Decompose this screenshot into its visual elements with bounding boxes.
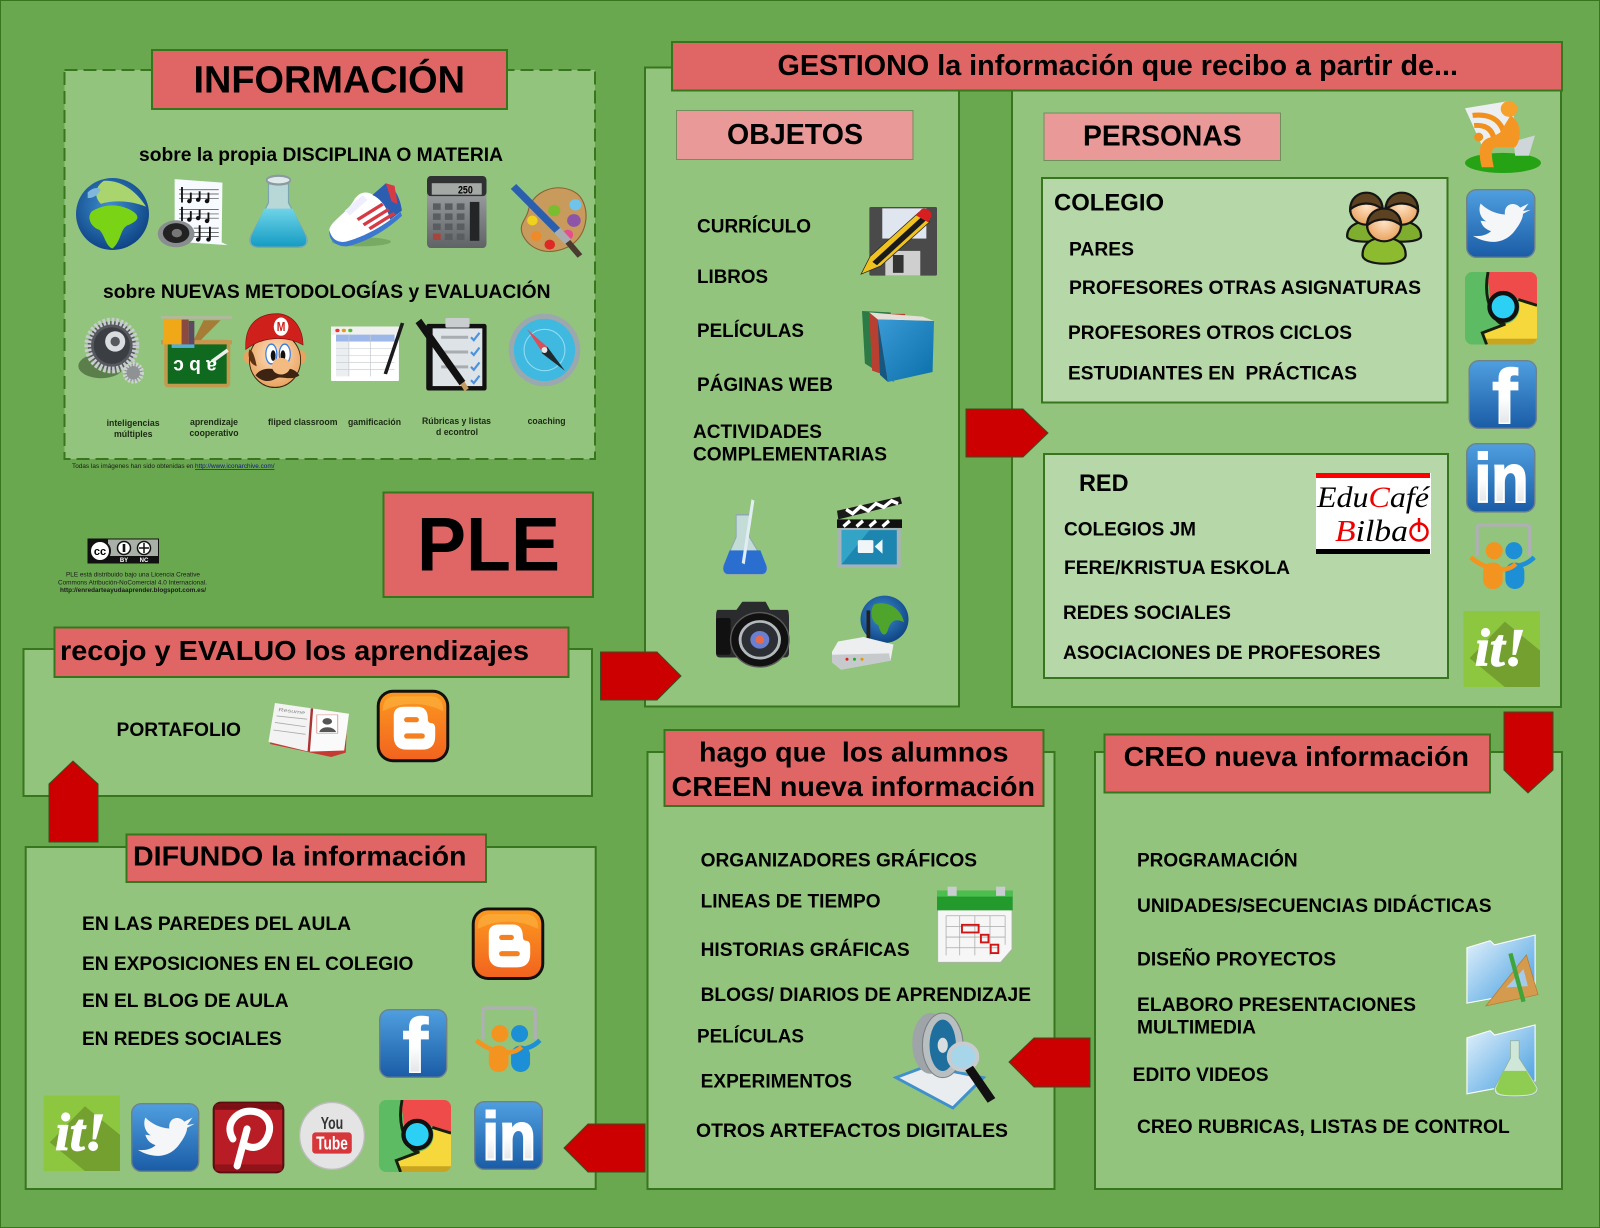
list: objetos items: PELÍCULAS: [697, 320, 804, 342]
image credit: Todas las imágenes han sido obtenidas en: [72, 463, 194, 470]
image credit: [72, 463, 275, 470]
list: colegio items: PARES: [1069, 240, 1134, 260]
icon: Creative Commons badge: BY: [120, 558, 128, 564]
icon: Creative Commons badge: [88, 539, 158, 564]
label: RED: RED: [1079, 470, 1128, 497]
list: creen items: PELÍCULAS: [697, 1026, 804, 1048]
list: creo items: CREO RUBRICAS, LISTAS DE CONTROL: [1137, 1117, 1510, 1138]
icon: group of people: [1347, 193, 1421, 264]
list: red items: ASOCIACIONES DE PROFESORES: [1063, 643, 1380, 664]
icon: Facebook: [1469, 354, 1536, 441]
icon: Facebook: f: [1492, 354, 1518, 441]
label: COLEGIO: COLEGIO: [1054, 190, 1164, 217]
list: creo items: UNIDADES/SECUENCIAS DIDÁCTICAS: [1137, 895, 1492, 917]
list: colegio items: [1068, 240, 1421, 385]
subheading: disciplina: sobre la propia DISCIPLINA O MATERIA: [139, 145, 503, 166]
image credit: http://www.iconarchive.com/: [195, 463, 275, 470]
icon: Twitter: [132, 1104, 199, 1171]
icon: folder with ruler: [1467, 935, 1538, 1006]
icon: LinkedIn: in: [1474, 441, 1529, 517]
list: creen items: [696, 850, 1031, 1142]
icon: SlideShare: [1471, 525, 1534, 589]
arrow: creo to alumnos: [1009, 1038, 1090, 1087]
icon: clapperboard: [837, 496, 902, 568]
title: PLE: [384, 492, 593, 597]
list: creen items: OTROS ARTEFACTOS DIGITALES: [696, 1121, 1008, 1142]
icon: Pinterest: [214, 1103, 283, 1172]
icon: table with pen: [331, 323, 402, 381]
list: red items: COLEGIOS JM: [1064, 520, 1196, 540]
list: difundo items: EN REDES SOCIALES: [82, 1029, 282, 1050]
panel: objetos: [645, 68, 959, 706]
list: creo items: ELABORO PRESENTACIONES: [1137, 995, 1416, 1016]
icon: YouTube: [300, 1102, 364, 1169]
icon: Chrome: [379, 1100, 451, 1172]
icon: sneaker: [329, 183, 402, 246]
arrow: objetos to personas: [966, 409, 1048, 457]
list: red items: [1063, 520, 1380, 664]
icon: chalkboard: [161, 316, 232, 386]
list: objetos items: [693, 216, 887, 466]
heading: GESTIONO: GESTIONO la información que recibo a partir de...: [778, 50, 1458, 82]
label: portafolio: PORTAFOLIO: [116, 720, 241, 741]
icon: Creative Commons badge: NC: [140, 558, 149, 564]
caption: gamificación: gamificación: [348, 417, 401, 428]
heading: PERSONAS: PERSONAS: [1083, 120, 1242, 152]
arrow: alumnos to difundo: [564, 1124, 645, 1172]
list: difundo items: EN EXPOSICIONES EN EL COLEGIO: [82, 954, 413, 975]
panel: creo: [1095, 734, 1562, 1189]
icon: router and globe: [832, 596, 908, 670]
icon: compass: [509, 314, 580, 386]
list: objetos items: LIBROS: [697, 267, 768, 288]
heading: PERSONAS: [1044, 113, 1280, 160]
icon: it!: it!: [1475, 618, 1526, 678]
list: creo items: [1133, 850, 1510, 1138]
list: creo items: EDITO VIDEOS: [1133, 1065, 1268, 1086]
heading: GESTIONO: [672, 42, 1562, 90]
box: red: [1044, 454, 1448, 678]
icon: Blogger: [472, 907, 544, 980]
license text: PLE está distribuido bajo una Licencia Creative: [66, 572, 200, 579]
icon: globe: [76, 178, 149, 250]
license text: http://enredarteayudaaprender.blogspot.com.es/: [60, 587, 206, 594]
heading: hago que los alumnos CREEN: hago que los alumnos: [699, 737, 1008, 768]
heading: DIFUNDO: [126, 834, 486, 882]
icon: blue flask: [723, 500, 767, 574]
panel: gestiono: [645, 42, 1562, 707]
icon: it!: [44, 1096, 120, 1171]
icon: SlideShare: [476, 1008, 540, 1072]
list: objetos items: COMPLEMENTARIAS: [693, 444, 887, 466]
list: colegio items: PROFESORES OTROS CICLOS: [1068, 323, 1352, 344]
subheading: metodologías: sobre NUEVAS METODOLOGÍAS y EVALUACIÓN: [103, 281, 550, 303]
icon: Mario: M: [277, 320, 285, 335]
icon: LinkedIn: in: [482, 1100, 536, 1175]
heading: recojo y EVALUO: recojo y EVALUO los aprendizajes: [60, 635, 529, 666]
list: red items: FERE/KRISTUA ESKOLA: [1064, 558, 1290, 579]
heading: INFORMACIÓN: INFORMACIÓN: [194, 58, 465, 102]
icon: chalkboard: a b c: [173, 355, 217, 376]
icon: YouTube: You: [321, 1113, 343, 1133]
caption: fliped classroom: fliped classroom: [268, 417, 338, 428]
list: difundo items: EN EL BLOG DE AULA: [82, 991, 289, 1012]
heading: CREO: CREO nueva información: [1124, 741, 1469, 772]
icon: floppy and pencil: [861, 207, 937, 276]
list: creo items: DISEÑO PROYECTOS: [1137, 949, 1336, 971]
license text: [58, 572, 207, 594]
list: difundo items: EN LAS PAREDES DEL AULA: [82, 914, 351, 935]
icon: it!: [1464, 611, 1540, 687]
heading: recojo y EVALUO: [54, 628, 568, 677]
caption: coaching: coaching: [528, 416, 566, 427]
heading: OBJETOS: OBJETOS: [727, 119, 863, 151]
arrow: recojo to objetos: [600, 652, 681, 700]
icon: flask: [250, 176, 307, 247]
icon: books: [862, 311, 934, 382]
heading: INFORMACIÓN: [152, 50, 507, 109]
icon: folder with flask: [1467, 1025, 1538, 1097]
panel: personas: [1012, 68, 1561, 707]
caption: rúbricas: [422, 416, 491, 438]
heading: DIFUNDO: DIFUNDO la información: [133, 841, 466, 872]
icon: calendar: [937, 887, 1013, 962]
caption: aprendizaje cooperativo: [190, 417, 239, 439]
list: creen items: HISTORIAS GRÁFICAS: [701, 939, 910, 961]
arrow: difundo to recojo: [49, 761, 98, 842]
icon: calculator: [427, 176, 486, 248]
icon: calculator: 250: [458, 185, 473, 197]
list: objetos items: ACTIVIDADES: [693, 422, 822, 443]
list: colegio items: ESTUDIANTES EN PRÁCTICAS: [1068, 363, 1357, 385]
list: creen items: BLOGS/ DIARIOS DE APRENDIZAJE: [701, 985, 1031, 1006]
list: difundo items: [82, 914, 413, 1050]
caption: inteligencias múltiples: múltiples: [114, 429, 152, 440]
heading: hago que los alumnos CREEN: CREEN nueva información: [672, 771, 1035, 802]
icon: RSS reader: [1465, 101, 1541, 173]
icon: resume book: [268, 703, 349, 757]
icon: YouTube: Tube: [316, 1133, 348, 1154]
icon: Mario: [244, 314, 306, 387]
icon: palette: [514, 186, 586, 256]
list: objetos items: PÁGINAS WEB: [697, 374, 833, 396]
caption: rúbricas: Rúbricas y listas: [422, 416, 491, 427]
icon: music sheet: [158, 179, 228, 247]
list: creen items: LINEAS DE TIEMPO: [701, 892, 881, 913]
list: creo items: MULTIMEDIA: [1137, 1018, 1256, 1039]
icon: Blogger: [377, 690, 449, 762]
caption: rúbricas: d econtrol: [436, 427, 478, 438]
icon: clipboard: [418, 318, 487, 391]
panel: hago que los alumnos creen: [648, 730, 1054, 1189]
caption: aprendizaje cooperativo: cooperativo: [190, 428, 239, 439]
icon: Chrome: [1465, 272, 1537, 344]
heading: CREO: [1104, 734, 1490, 792]
icon: it!: it!: [55, 1104, 106, 1162]
license text: Commons Atribución-NoComercial 4.0 Internacional.: [58, 580, 207, 586]
caption: aprendizaje cooperativo: aprendizaje: [190, 417, 238, 428]
list: objetos items: CURRÍCULO: [697, 216, 811, 238]
icon: film reel and magnifier: [896, 1013, 992, 1108]
title: PLE: PLE: [417, 503, 560, 588]
icon: Creative Commons badge: cc: [94, 546, 106, 558]
list: red items: REDES SOCIALES: [1063, 603, 1231, 624]
icon: Twitter: [1467, 190, 1535, 257]
panel: recojo y evaluo: [24, 628, 592, 796]
list: creen items: EXPERIMENTOS: [701, 1072, 852, 1093]
icon: Facebook: [380, 1003, 447, 1090]
icon: gears: [78, 321, 142, 382]
logo: EduCafé Bilbao: EduCafé: [1316, 481, 1431, 514]
caption: inteligencias múltiples: inteligencias: [107, 418, 160, 429]
heading: OBJETOS: [676, 110, 913, 160]
arrow: personas to creo: [1504, 712, 1553, 793]
icon: camera: [716, 602, 789, 667]
icon: resume book: Resume: [278, 707, 306, 716]
list: creen items: ORGANIZADORES GRÁFICOS: [701, 850, 977, 872]
heading: hago que los alumnos CREEN: [664, 730, 1044, 806]
panel: INFORMACIÓN: [64, 50, 595, 459]
list: creo items: PROGRAMACIÓN: [1137, 850, 1298, 872]
icon: Facebook: f: [402, 1003, 428, 1090]
list: colegio items: PROFESORES OTRAS ASIGNATURAS: [1069, 278, 1421, 299]
caption: inteligencias múltiples: [107, 418, 160, 440]
box: colegio: [1042, 178, 1448, 402]
logo: EduCafé Bilbao: Bilba: [1335, 513, 1408, 548]
logo: EduCafé Bilbao: [1316, 473, 1431, 554]
panel: difundo: [26, 834, 596, 1189]
